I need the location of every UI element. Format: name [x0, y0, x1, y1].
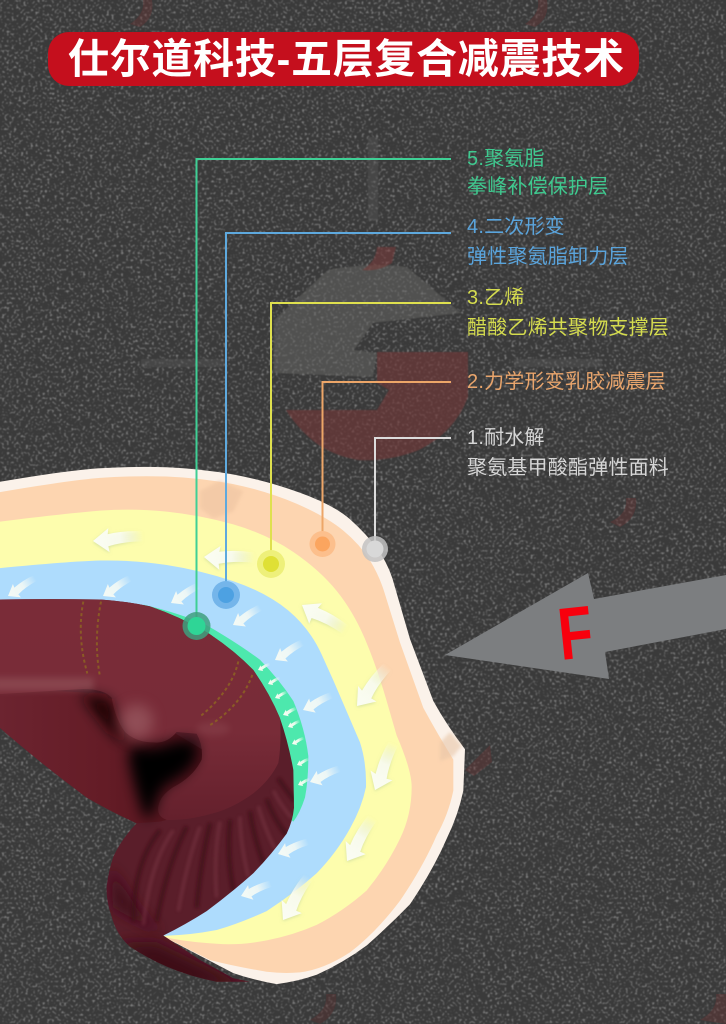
glove lower palm: [0, 687, 213, 823]
label 4: 弹性聚氨脂卸力层: [467, 245, 629, 268]
marker 1: [362, 536, 388, 562]
callout 1: outer fabric: [362, 426, 669, 562]
label 2: 2.力学形变乳胶减震层: [467, 370, 666, 393]
label 4: 4.二次形变: [467, 215, 565, 238]
title text: 仕尔道科技-五层复合减震技术: [68, 36, 624, 82]
glove highlights: [0, 678, 230, 739]
glove fist front: [0, 599, 281, 820]
layered glove cross-section: [0, 467, 465, 987]
watermark: large faded logo: [141, 137, 602, 460]
callout 4: secondary deformation: [212, 215, 629, 609]
callout 5: polyurethane: [182, 147, 608, 640]
title banner: [48, 32, 639, 86]
leader line 1: [375, 438, 451, 550]
callout 3: EVA: [257, 286, 669, 578]
callout 2: latex: [310, 370, 666, 557]
layer 4: blue polyurethane layer: [0, 560, 366, 936]
leader line 5: [196, 159, 451, 626]
leader line 2: [322, 382, 451, 544]
glove cuff folds: [110, 779, 295, 987]
marker 3: [257, 550, 285, 578]
layer 5: green protective layer: [143, 605, 308, 822]
boxing glove illustration: [0, 599, 295, 987]
arrow shape: [445, 573, 726, 679]
layer 2: peach latex layer: [0, 476, 453, 973]
force flow arrows: green layer: [257, 661, 312, 788]
marker 4: [212, 581, 240, 609]
leader line 3: [271, 303, 451, 564]
layer 3: yellow EVA layer: [0, 510, 412, 944]
label 3: 3.乙烯: [467, 286, 524, 309]
label 1: 1.耐水解: [467, 426, 545, 449]
marker 5: [182, 612, 210, 640]
arrow letter: F: [554, 590, 597, 676]
glove silhouette: [0, 599, 294, 982]
label 1: 聚氨基甲酸酯弹性面料: [467, 456, 669, 479]
force flow arrows: blue layer: [4, 573, 343, 903]
layer 1: white outer fabric: [0, 467, 465, 984]
force flow arrows: yellow layer: [92, 526, 406, 927]
glove stitching: [81, 602, 252, 725]
marker 2: [310, 531, 336, 557]
label 3: 醋酸乙烯共聚物支撑层: [467, 316, 669, 339]
label 5: 5.聚氨脂: [467, 147, 545, 170]
title pill: [48, 32, 639, 86]
glove shadow: [80, 694, 197, 818]
watermark marks on peach layer: [200, 481, 462, 761]
leader line 4: [226, 233, 451, 595]
force arrow F: [445, 573, 726, 679]
label 5: 拳峰补偿保护层: [467, 175, 608, 198]
